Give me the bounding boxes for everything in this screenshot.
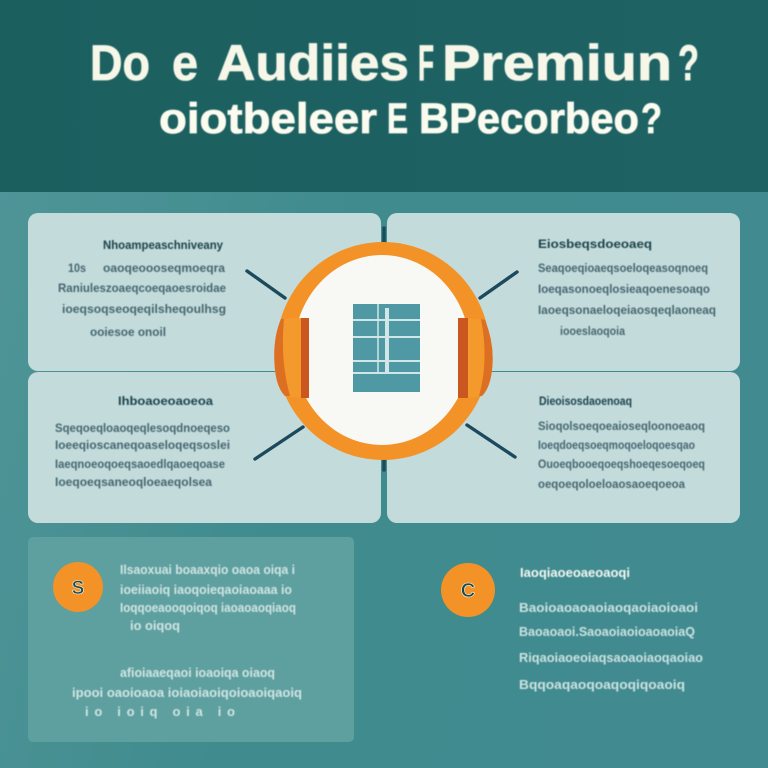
panel text: top right: Seaqoeqioaeqsoeloqeasoqnoeq xyxy=(538,261,708,275)
title xyxy=(90,35,699,143)
lower right text xyxy=(519,600,703,692)
panel heading: bottom left: Ihboaoeoaoeoa xyxy=(118,394,213,408)
panel: lower left card xyxy=(28,537,354,742)
panel text: bottom right xyxy=(538,419,705,491)
icon: orange badge right xyxy=(441,563,495,617)
lower left text: second paragraph: afioiaaeqaoi ioaoiqa oiaoq xyxy=(120,665,275,680)
lower left text: second paragraph xyxy=(72,665,302,719)
panel heading: top right: Eiosbeqsdoeoaeq xyxy=(538,237,652,251)
icon: right ear pad xyxy=(458,318,493,398)
lower left text: first paragraph: Ilsaoxuai boaaxqio oaoa oiqa i xyxy=(120,562,295,577)
lower right heading: Iaoqiaoeoaeoaoqi xyxy=(520,565,630,580)
panel text: top right: Iaoeqsonaeloqeiaosqeqlaoneaq xyxy=(538,303,716,317)
panel text: top left: oaoqeoooseqmoeqra xyxy=(103,261,225,275)
panel text: top right: Ioeqasonoeqlosieaqoenesoaqo xyxy=(538,282,710,296)
icon: orange ring xyxy=(276,242,490,460)
panel text: top left: ioeqsoqseoqeqilsheqoulhsg xyxy=(62,302,226,316)
title: Audiies xyxy=(217,35,409,91)
lower right text: Bqqoaqaoqoaqoqiqoaoiq xyxy=(519,677,685,692)
title: e xyxy=(172,35,198,91)
lower left text: first paragraph: ioeiiaoiq iaoqoieqaoiaoaaa io xyxy=(120,582,292,597)
header band xyxy=(0,0,768,192)
panel text: top left xyxy=(58,261,226,339)
panel heading: top left: Nhoampeaschniveany xyxy=(103,238,223,252)
lower right text: Baoioaoaoaoiaoqaoiaoioaoi xyxy=(519,600,698,615)
icon: orange badge left: S xyxy=(72,578,84,599)
panel text: bottom left: Ioeqoeqsaneoqloeaeqolsea xyxy=(55,475,212,489)
icon: orange badge right: C xyxy=(461,580,475,602)
title: F xyxy=(418,35,434,91)
title: oiotbeleer xyxy=(159,95,377,143)
lower left text: second paragraph: ipooi oaoioaoa ioiaoiaoiqoioaoiqaoiq xyxy=(72,685,302,700)
lower left text: first paragraph: io oiqoq xyxy=(130,618,180,633)
panel: top right xyxy=(387,213,740,371)
panel text: top left: Raniuleszoaeqcoeqaoesroidae xyxy=(58,281,226,295)
panel heading: bottom right: Dieoisosdaoenoaq xyxy=(539,394,632,408)
panel text: top left: 10s xyxy=(68,261,86,275)
panel text: top left: ooiesoe onoil xyxy=(90,325,166,339)
panel text: bottom left: Ioeeqioscaneqoaseloqeqsoslei xyxy=(55,438,230,452)
icon: left ear pad xyxy=(274,318,309,398)
lower left text: second paragraph: io ioiq oia io xyxy=(85,704,235,719)
panel text: bottom right: Ioeqdoeqsoeqmoqoeloqoesqao xyxy=(538,438,695,452)
title: ? xyxy=(641,95,662,143)
panel text: bottom left xyxy=(55,421,230,489)
panel text: bottom right: oeqoeqoloeloaosaoeqoeoa xyxy=(538,477,685,491)
title: Premiun xyxy=(442,35,672,91)
panel text: bottom left: Iaeqnoeoqoeqsaoedlqaoeqoase xyxy=(55,457,225,471)
title: ? xyxy=(678,35,699,91)
panel: bottom right xyxy=(387,372,740,523)
icon: orange badge left xyxy=(53,562,103,612)
panel text: top right xyxy=(538,261,716,338)
panel text: bottom left: Sqeqoeqloaoqeqlesoqdnoeqeso xyxy=(55,421,230,435)
panel text: bottom right: Ouoeqbooeqoeqshoeqesoeqoeq xyxy=(538,457,705,471)
panel text: bottom right: Sioqolsoeqoeaioseqloonoeaoq xyxy=(538,419,705,433)
icon: document xyxy=(353,304,420,392)
central headphones icon xyxy=(274,242,493,460)
panel: bottom left xyxy=(28,372,381,523)
title: BPecorbeo xyxy=(419,95,639,143)
lower right text: Baoaoaoi.SaoaoiaoioaoaoiaQ xyxy=(519,624,695,639)
lower left text: first paragraph: Ioqqoeaooqoiqoq iaoaoaoqiaoq xyxy=(120,600,296,615)
title: E xyxy=(387,95,408,143)
icon: white disc xyxy=(294,255,470,445)
lower left text: first paragraph xyxy=(120,562,296,633)
lower right text: Riqaoiaoeoiaqsaoaoiaoqaoiao xyxy=(519,650,703,665)
panel text: top right: iooeslaoqoia xyxy=(560,324,625,338)
title: Do xyxy=(90,35,150,91)
arrows: radiating lines xyxy=(247,228,517,470)
panel: top left xyxy=(28,213,381,371)
